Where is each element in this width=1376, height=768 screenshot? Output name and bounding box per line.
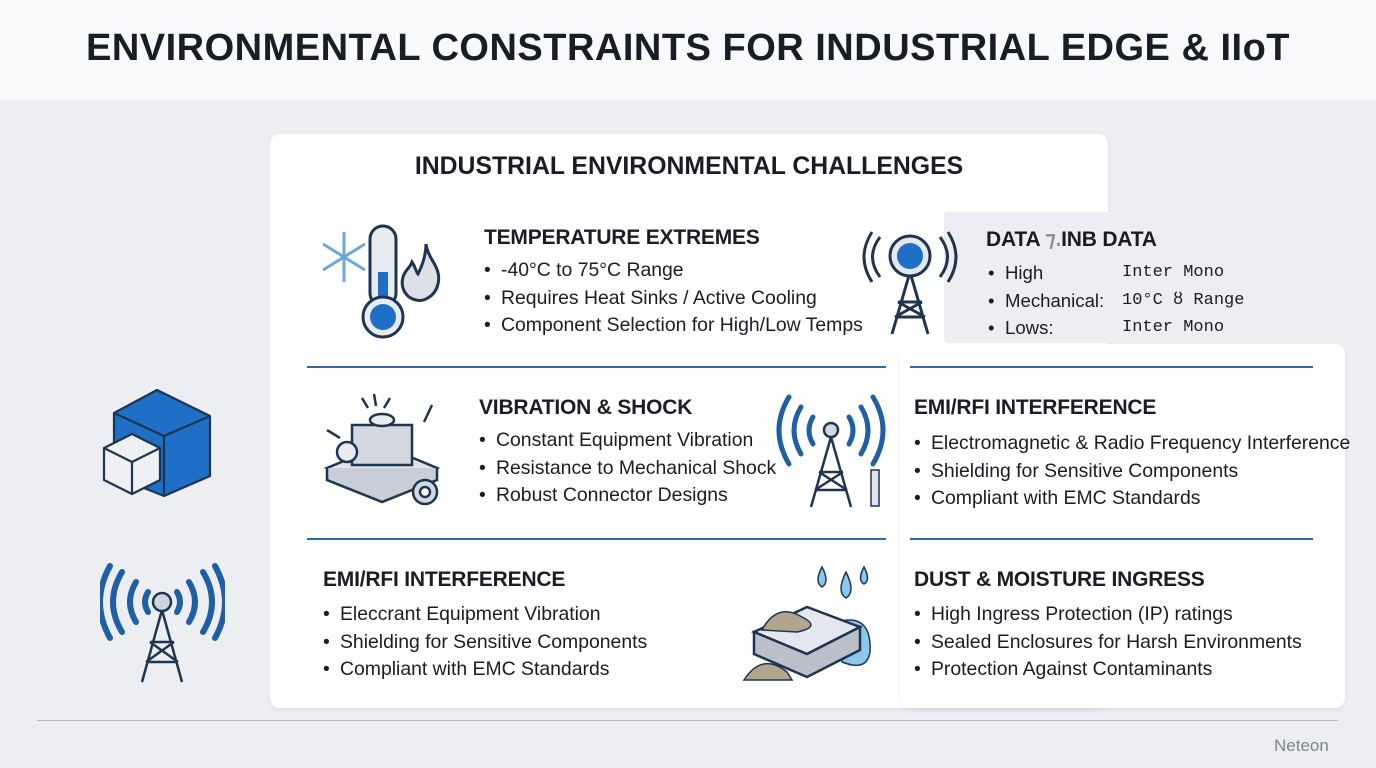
icon: radio tower: [776, 394, 886, 508]
data panel: [944, 212, 1345, 343]
data panel: Mechanical:: [1005, 290, 1104, 310]
section: EMI left: EMI/RFI INTERFERENCE: [323, 568, 565, 591]
section: temperature: [484, 226, 863, 336]
section: EMI right: Shielding for Sensitive Components: [931, 460, 1238, 482]
section: EMI left: Eleccrant Equipment Vibration: [340, 603, 600, 625]
section: temperature: TEMPERATURE EXTREMES: [484, 226, 760, 249]
section: EMI right: [914, 396, 1350, 509]
icon: machine: [324, 394, 440, 506]
section: vibration: Robust Connector Designs: [496, 484, 728, 506]
title bar: [0, 0, 1376, 100]
data panel: 10°C ȣ Range: [1122, 290, 1244, 310]
icon: tower gear: [862, 231, 958, 334]
section: dust: DUST & MOISTURE INGRESS: [914, 568, 1205, 591]
icon: cubes: [102, 388, 212, 498]
section: EMI left: Compliant with EMC Standards: [340, 658, 609, 680]
section: EMI left: [323, 568, 647, 680]
icon: thermometer: [322, 224, 440, 338]
icon: rugged box: [742, 566, 871, 681]
footer brand: Neteon: [1274, 736, 1329, 755]
data panel: Inter Mono: [1122, 318, 1224, 337]
section: EMI right: Electromagnetic & Radio Frequency Interference: [931, 432, 1350, 454]
section: vibration: [479, 396, 776, 506]
section: dust: Sealed Enclosures for Harsh Environments: [931, 630, 1302, 652]
section: vibration: Constant Equipment Vibration: [496, 429, 753, 451]
data panel: Lows:: [1005, 317, 1054, 338]
section: vibration: VIBRATION & SHOCK: [479, 396, 692, 419]
section: vibration: Resistance to Mechanical Shock: [496, 456, 776, 478]
data panel: High: [1005, 262, 1043, 283]
section: temperature: Component Selection for High/Low Temps: [501, 314, 863, 336]
section: EMI right: Compliant with EMC Standards: [931, 487, 1200, 509]
card heading: INDUSTRIAL ENVIRONMENTAL CHALLENGES: [415, 153, 963, 180]
section: EMI left: Shielding for Sensitive Components: [340, 630, 647, 652]
section: dust: Protection Against Contaminants: [931, 658, 1212, 680]
main card: [270, 134, 1108, 708]
title: ENVIRONMENTAL CONSTRAINTS FOR INDUSTRIAL EDGE & IIoT: [86, 27, 1290, 69]
section: temperature: Requires Heat Sinks / Active Cooling: [501, 286, 817, 308]
icon: left tower: [100, 563, 225, 682]
data panel: DATA ⁊.INB DATA: [986, 228, 1157, 251]
section: dust: High Ingress Protection (IP) ratings: [931, 603, 1233, 625]
section: temperature: -40°C to 75°C Range: [501, 259, 684, 281]
section: EMI right: EMI/RFI INTERFERENCE: [914, 396, 1156, 419]
footer line: [37, 720, 1338, 721]
data panel: Inter Mono: [1122, 263, 1224, 282]
section: dust: [914, 568, 1302, 680]
